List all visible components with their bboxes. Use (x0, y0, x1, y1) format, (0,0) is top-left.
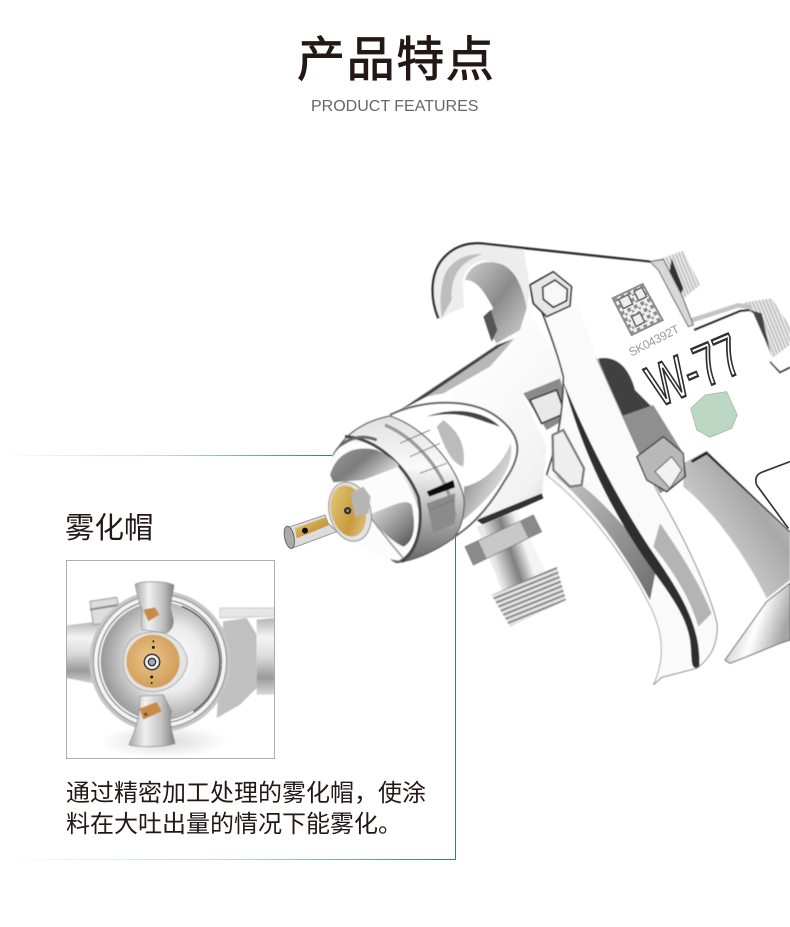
trigger lever (537, 294, 717, 685)
rear body (527, 260, 790, 567)
photo: atomizing cap front view (66, 560, 275, 759)
horn top (135, 582, 174, 633)
left barrel (66, 621, 100, 685)
title: 产品特点 (297, 34, 495, 87)
nozzle center (344, 507, 351, 514)
barrel body (397, 312, 570, 523)
brass plate (123, 632, 187, 691)
QR code (613, 284, 663, 335)
trigger ring opening (553, 430, 584, 487)
serial number: SK04392T (626, 322, 682, 359)
right fittings (220, 608, 274, 618)
outer rings (89, 591, 231, 732)
description text: 料在大吐出量的情况下能雾化。 (66, 811, 402, 838)
W-77 mark: W-77 (638, 321, 751, 419)
warning badge (756, 462, 790, 528)
hook (433, 243, 650, 343)
panel: atomizing cap frame (22, 455, 456, 860)
horn bottom (129, 695, 175, 747)
lever screw (530, 272, 572, 317)
horn tip (282, 515, 337, 549)
trigger adjust nut (637, 437, 685, 492)
serial text and logo (613, 284, 751, 419)
brass nozzle plate (323, 478, 377, 546)
heading: atomizing cap: 雾化帽 (65, 512, 154, 545)
green label (691, 392, 737, 437)
rear knob upper (662, 251, 700, 300)
air cap dome (325, 442, 419, 561)
rear handle (683, 451, 790, 598)
air inlet fitting (465, 510, 566, 627)
illustration: W-77 spray gun (284, 241, 790, 686)
description text (66, 780, 426, 838)
needle packing (523, 378, 570, 430)
rear bracket edge (694, 310, 750, 330)
hex base of rear knob (650, 259, 693, 327)
rear knob lower (743, 298, 790, 358)
knurled ring (335, 416, 464, 563)
rear hand rest (725, 583, 790, 663)
subtitle: PRODUCT FEATURES (311, 98, 478, 115)
bowl shell (390, 403, 517, 537)
description text: 通过精密加工处理的雾化帽，使涂 (66, 780, 426, 807)
air slot (598, 358, 652, 422)
